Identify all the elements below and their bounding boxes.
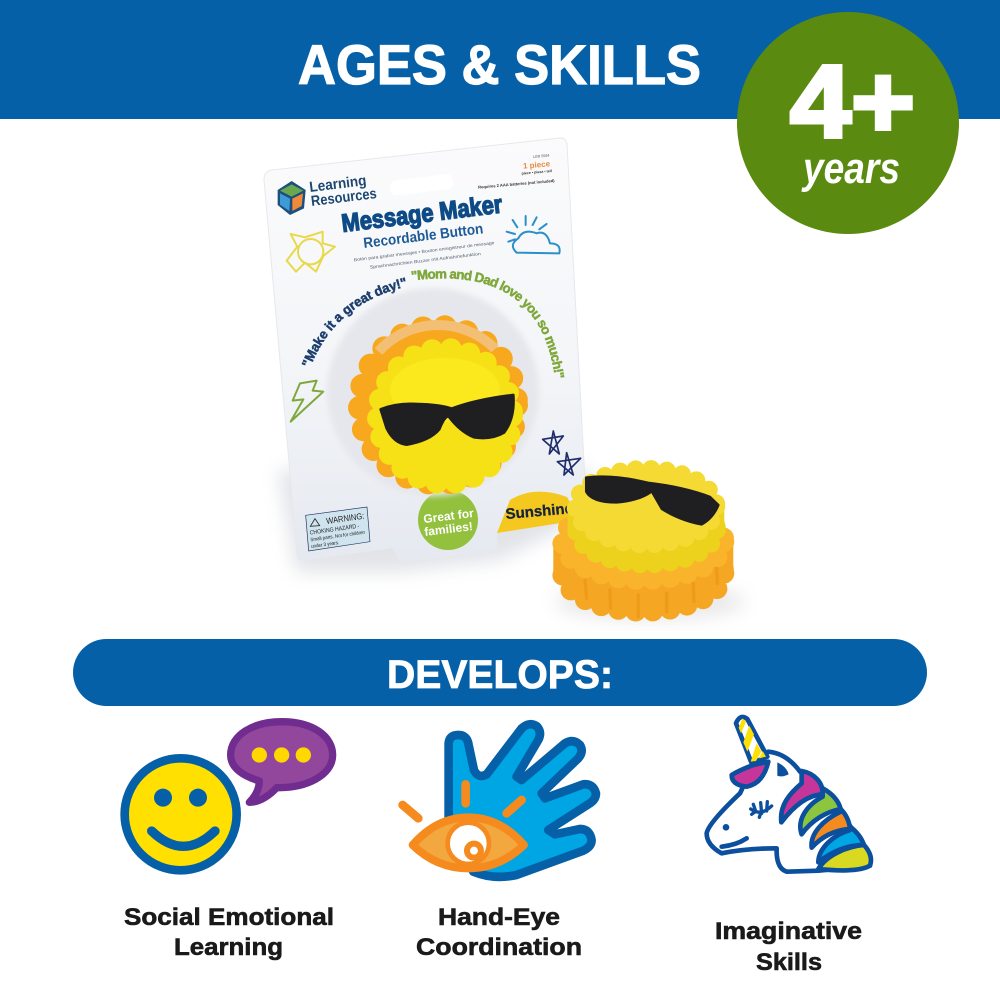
card texts: Botón para grabar mensajes • Bouton enregistreur de message bbox=[354, 240, 495, 262]
age badge: 4+ bbox=[790, 44, 915, 159]
families badge: families! bbox=[423, 519, 474, 539]
speech bubble bbox=[231, 722, 333, 802]
unicorn head bbox=[707, 752, 870, 872]
warning label: under 3 years. bbox=[311, 540, 340, 550]
smiley face bbox=[125, 758, 237, 870]
icon: smiley with speech bubble bbox=[125, 722, 333, 870]
toy sunglasses bbox=[586, 476, 719, 525]
horn bbox=[736, 717, 767, 763]
sunshine tag: Sunshine bbox=[505, 500, 574, 523]
label: hand-eye coordination: Coordination bbox=[416, 934, 582, 961]
label: hand-eye coordination bbox=[416, 904, 582, 961]
brand logo: Learning bbox=[309, 173, 367, 196]
loose sun shadow bbox=[555, 584, 745, 620]
warning label bbox=[306, 507, 370, 551]
blister bubble bbox=[327, 288, 539, 496]
sunshine tag bbox=[497, 492, 580, 533]
label: imaginative skills: Imaginative bbox=[715, 918, 862, 945]
curved slogans: "Make it a great day!" bbox=[302, 277, 406, 366]
card texts: Sprachnachrichten Buzzer mit Aufnahmefunktion bbox=[370, 251, 482, 270]
warning label: WARNING: bbox=[326, 511, 365, 526]
face details bbox=[722, 802, 772, 847]
loose sun toy bbox=[553, 469, 733, 617]
blister card bbox=[264, 138, 585, 556]
develops banner bbox=[73, 639, 927, 706]
doodle: cloud bbox=[507, 216, 560, 253]
yellow top bbox=[568, 469, 724, 564]
sunglasses bbox=[381, 395, 514, 445]
card texts: Message Maker bbox=[340, 190, 504, 238]
label: social emotional learning: Learning bbox=[174, 934, 283, 961]
families badge: Great for bbox=[423, 506, 475, 526]
orange base bbox=[553, 504, 733, 617]
icon: unicorn bbox=[707, 717, 871, 872]
families badge bbox=[418, 490, 478, 550]
ear bbox=[732, 762, 768, 787]
card texts: Requires 2 AAA batteries (not included) bbox=[478, 178, 555, 190]
card texts: LER 5584 bbox=[533, 154, 550, 159]
rays bbox=[403, 784, 522, 818]
age badge: years bbox=[801, 144, 900, 193]
hand bbox=[449, 724, 596, 877]
brand logo bbox=[278, 173, 378, 215]
title: AGES & SKILLS bbox=[298, 33, 701, 96]
packaged sun bbox=[325, 292, 551, 518]
product photo bbox=[264, 138, 741, 623]
mane bbox=[781, 771, 871, 870]
card texts: "Mom and Dad love you so much!" bbox=[411, 270, 564, 378]
warning label: CHOKING HAZARD - bbox=[309, 524, 360, 537]
label: imaginative skills bbox=[715, 918, 862, 976]
icon: hand and eye bbox=[403, 724, 596, 877]
age badge bbox=[737, 12, 959, 234]
doodle: lightning bbox=[291, 381, 323, 422]
card texts: Recordable Button bbox=[363, 221, 484, 252]
label: social emotional learning bbox=[124, 904, 334, 961]
develops banner: DEVELOPS: bbox=[387, 653, 613, 697]
label: imaginative skills: Skills bbox=[756, 949, 822, 976]
eye bbox=[413, 817, 524, 868]
doodle: stars bbox=[543, 431, 581, 475]
card shadow bbox=[278, 470, 590, 572]
warning label: Small parts. Not for children bbox=[310, 530, 366, 543]
header banner bbox=[0, 0, 1000, 119]
label: hand-eye coordination: Hand-Eye bbox=[438, 904, 560, 931]
label: social emotional learning: Social Emotional bbox=[124, 904, 334, 931]
card texts: piece • pieza • teil bbox=[521, 169, 552, 176]
doodle: sun bbox=[287, 232, 335, 272]
brand logo: Resources bbox=[310, 186, 378, 210]
card texts bbox=[302, 154, 564, 378]
card texts: 1 piece bbox=[523, 159, 551, 171]
